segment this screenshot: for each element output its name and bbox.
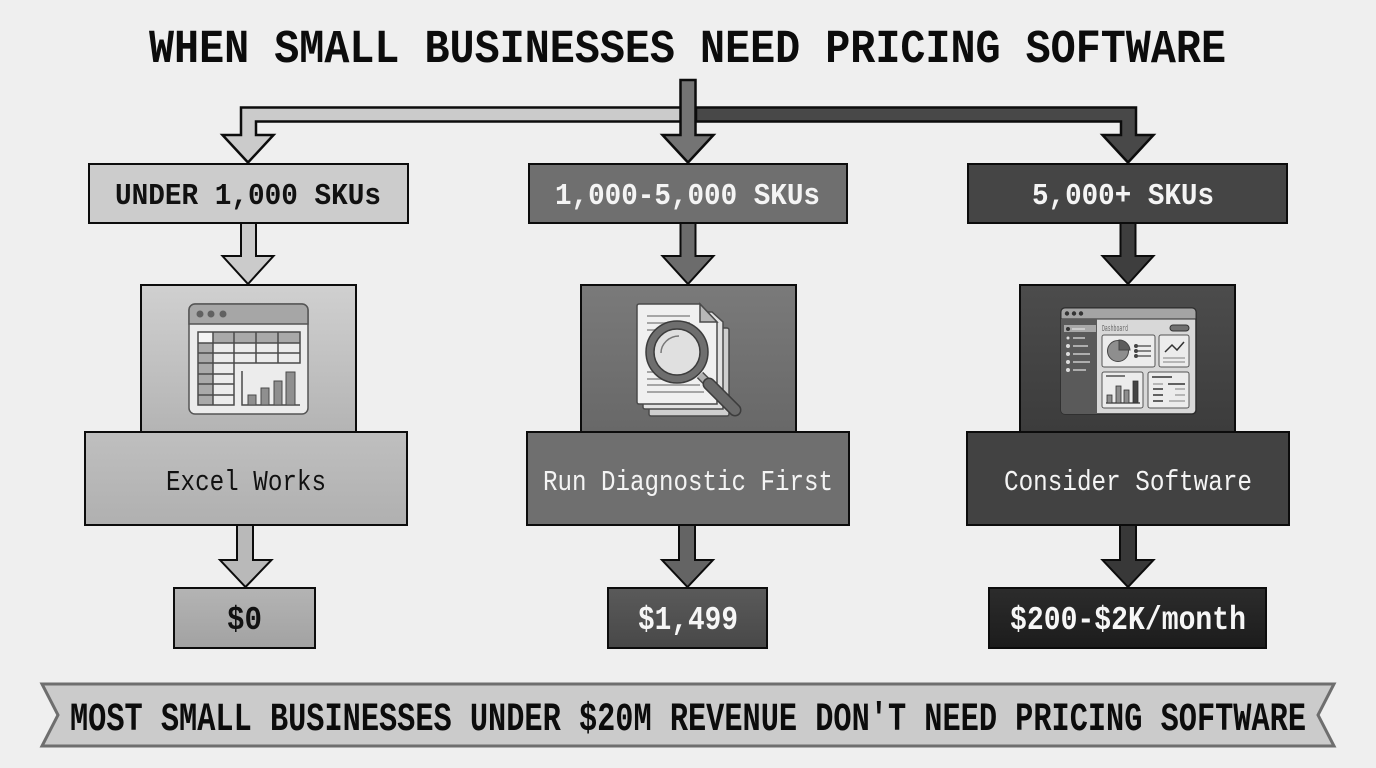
arrow: SKU to panel left <box>222 223 274 284</box>
icon: software dashboard window <box>1061 308 1196 414</box>
price box: $1,499 <box>608 588 767 648</box>
column: 1,000-5,000 SKUs <box>527 164 849 648</box>
SKU box: 1,000-5,000: 1,000-5,000 SKUs <box>555 179 820 214</box>
icon panel: diagnostic <box>581 285 796 432</box>
label box: Run Diagnostic First <box>527 432 849 525</box>
icon: software dashboard window: Dashboard <box>1102 324 1128 334</box>
arrow: label to price left <box>220 525 272 587</box>
arrow: SKU to panel middle <box>662 223 714 284</box>
arrow: branch to under 1,000 SKUs <box>222 108 681 162</box>
price box: $0 <box>174 588 315 648</box>
icon panel: spreadsheet <box>141 285 356 432</box>
arrow: label to price right <box>1102 525 1154 587</box>
banner: key takeaway <box>42 684 1334 746</box>
label box: Consider Software: Consider Software <box>1004 466 1252 499</box>
SKU box: 5,000+ <box>968 164 1287 223</box>
SKU box: under 1,000 <box>89 164 408 223</box>
title: WHEN SMALL BUSINESSES NEED PRICING SOFTWARE <box>149 24 1226 77</box>
SKU box: 5,000+: 5,000+ SKUs <box>1032 179 1214 214</box>
label box: Excel Works <box>85 432 407 525</box>
price box: $200-$2K/month: $200-$2K/month <box>1010 602 1246 639</box>
icon panel: dashboard <box>1020 285 1235 432</box>
label box: Run Diagnostic First: Run Diagnostic First <box>543 466 833 499</box>
icon: documents and magnifying glass <box>637 304 735 416</box>
SKU box: 1,000-5,000 <box>529 164 847 223</box>
arrow: branch to 1,000-5,000 SKUs <box>662 80 714 162</box>
arrow: SKU to panel right <box>1102 223 1154 284</box>
SKU box: under 1,000: UNDER 1,000 SKUs <box>115 179 381 214</box>
label box: Excel Works: Excel Works <box>166 466 326 499</box>
arrow: label to price middle <box>662 525 713 587</box>
price box: $1,499: $1,499 <box>638 602 738 639</box>
price box: $0: $0 <box>227 602 262 639</box>
column: 5,000+ SKUs <box>967 164 1289 648</box>
column: under 1,000 SKUs <box>85 164 408 648</box>
icon: spreadsheet window <box>189 304 308 414</box>
label box: Consider Software <box>967 432 1289 525</box>
arrow: branch to 5,000+ SKUs <box>696 108 1154 162</box>
price box: $200-$2K/month <box>989 588 1266 648</box>
